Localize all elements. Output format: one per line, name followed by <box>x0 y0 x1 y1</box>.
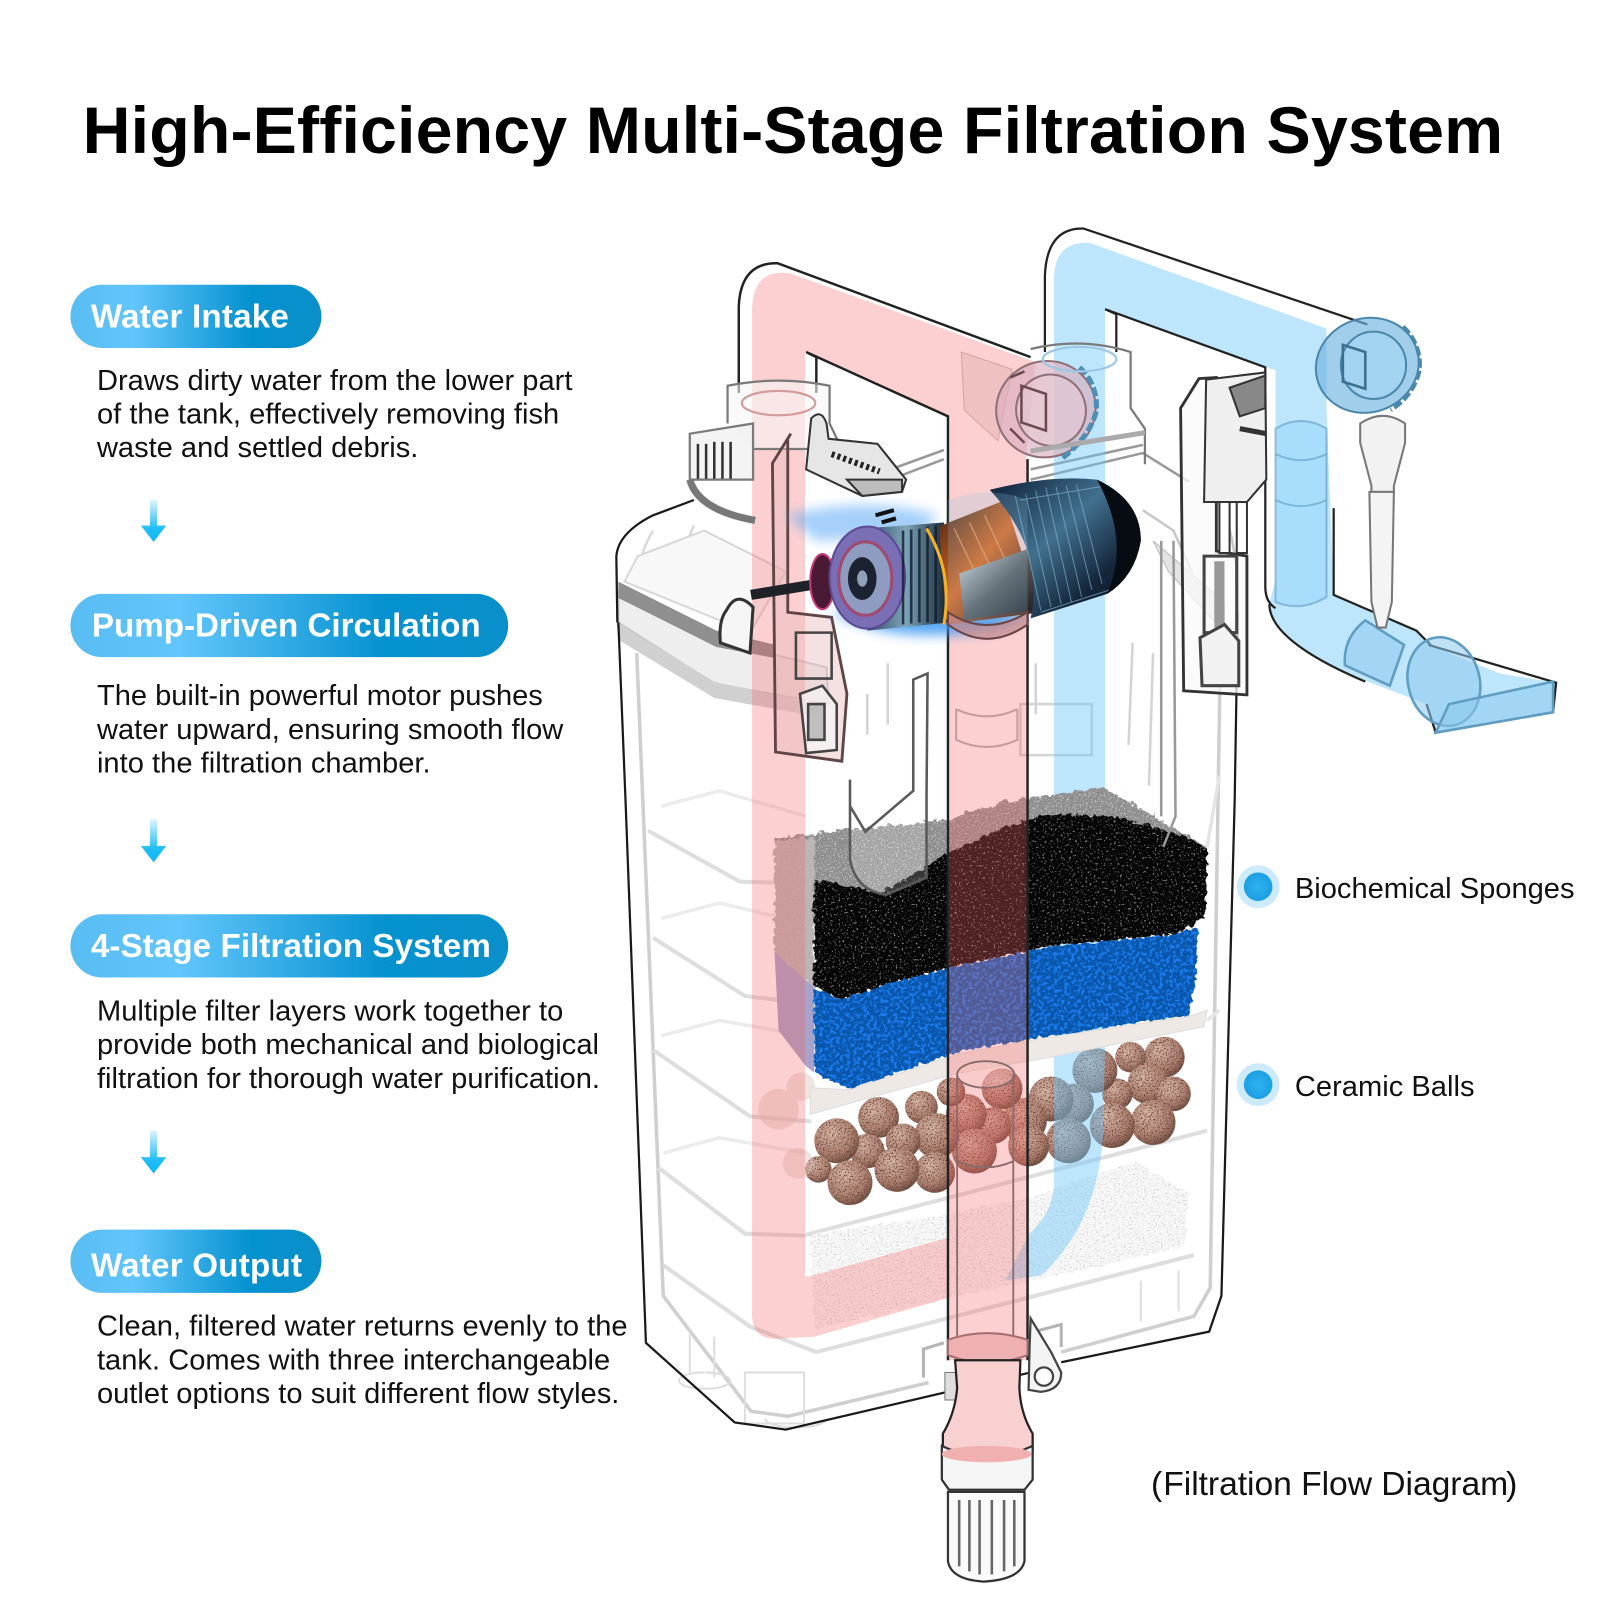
step: 4-stage filtration <box>70 914 600 1095</box>
arrow: intake to circulation <box>141 500 166 542</box>
shaft <box>751 582 832 595</box>
lower neck ring on tube <box>948 612 1028 747</box>
callout: ceramic balls <box>1237 1063 1474 1106</box>
arrow: filtration to output <box>141 1131 166 1173</box>
description: output: outlet options to suit different flow styles. <box>97 1378 619 1410</box>
description: circulation: The built-in powerful motor pushes <box>97 680 543 712</box>
tube collar <box>948 1333 1028 1363</box>
step: water intake <box>70 285 572 464</box>
magenta washer <box>810 554 835 609</box>
arrow: circulation to filtration <box>141 819 166 862</box>
heading pill: output: Water Output <box>91 1248 302 1285</box>
right neck collar <box>1031 344 1145 464</box>
right bracket <box>1181 378 1247 695</box>
pink end cap <box>983 347 1109 471</box>
rotor drum <box>990 478 1141 618</box>
tube in front of motor <box>948 492 1028 622</box>
motor glow top <box>786 505 939 541</box>
motor glow bottom <box>832 602 1031 635</box>
mount hook <box>1029 1318 1061 1392</box>
callout: ceramic balls: Ceramic Balls <box>1295 1071 1474 1103</box>
step: water output <box>70 1230 628 1410</box>
right window latch <box>1200 556 1239 686</box>
description: water intake: Draws dirty water from the lower part <box>97 365 572 397</box>
silver core <box>959 543 1045 620</box>
description: water intake: waste and settled debris. <box>96 432 418 464</box>
blue return flow <box>1005 243 1556 1281</box>
callout: biochemical sponges <box>1237 865 1574 908</box>
tank outline <box>616 500 1238 1430</box>
description: water intake: of the tank, effectively removing fish <box>97 398 559 430</box>
ceramic balls <box>805 1037 1191 1205</box>
description: filtration: filtration for thorough water purification. <box>97 1063 600 1095</box>
left bracket <box>772 434 847 761</box>
tank lid band <box>616 531 1224 716</box>
pink intake flow <box>752 273 1036 1360</box>
latch loop left <box>720 599 753 653</box>
tank inner details <box>637 643 1220 1428</box>
strainer head <box>942 1446 1033 1582</box>
description: filtration: Multiple filter layers work together to <box>97 995 563 1027</box>
diagram caption: ( <box>1151 1466 1163 1503</box>
biochemical sponge: black <box>774 788 1207 1000</box>
description: filtration: provide both mechanical and biological <box>97 1029 599 1061</box>
small outlet tube <box>1360 416 1405 628</box>
front bell <box>830 522 949 631</box>
description: circulation: into the filtration chamber. <box>97 747 431 779</box>
return tube outline <box>1045 229 1556 733</box>
title: High-Efficiency Multi-Stage Filtration System <box>83 94 1503 168</box>
left latch top <box>806 414 906 496</box>
description: output: tank. Comes with three interchangeable <box>97 1344 610 1376</box>
step: pump-driven circulation <box>70 594 564 779</box>
pink tube fin <box>961 352 1012 441</box>
inner tube top <box>957 1061 1014 1342</box>
return tube overlap sleeve <box>1276 421 1327 606</box>
heading pill: circulation <box>70 594 508 657</box>
diagram: filter cross-section <box>616 229 1556 1582</box>
inner chute <box>850 541 1176 895</box>
callout: biochemical sponges: Biochemical Sponges <box>1295 873 1574 905</box>
description: circulation <box>96 680 564 779</box>
description: circulation: water upward, ensuring smooth flow <box>96 714 564 746</box>
description: water intake <box>96 365 572 464</box>
left lower latch <box>796 633 837 753</box>
heading pill: circulation: Pump-Driven Circulation <box>92 608 481 645</box>
heading pill: water intake: Water Intake <box>91 299 289 336</box>
coarse sponge: blue <box>774 927 1198 1089</box>
diagram caption: ) <box>1506 1466 1517 1503</box>
description: output <box>97 1311 628 1410</box>
upper tank shoulders <box>638 445 1238 612</box>
lower neck <box>943 1360 1033 1460</box>
faint balls behind clear wall <box>758 1072 815 1179</box>
heading pill: output <box>70 1230 321 1293</box>
heading pill: water intake <box>70 285 321 348</box>
description: output: Clean, filtered water returns evenly to the <box>97 1311 628 1343</box>
description: filtration <box>97 995 600 1095</box>
intake tube outline <box>739 263 1031 1360</box>
diagram caption: Filtration Flow Diagram <box>1163 1466 1508 1503</box>
blue end cap <box>1302 303 1432 427</box>
heading pill: filtration: 4-Stage Filtration System <box>91 928 491 965</box>
heading pill: filtration <box>70 914 508 978</box>
motor <box>751 478 1141 635</box>
tray white edge <box>810 1010 1207 1114</box>
amber ring <box>927 529 946 624</box>
right latch <box>1204 372 1266 553</box>
white filter floss <box>810 1161 1189 1330</box>
copper windings <box>939 500 1041 624</box>
nozzle detail <box>1345 620 1553 734</box>
left neck collar <box>690 381 842 520</box>
